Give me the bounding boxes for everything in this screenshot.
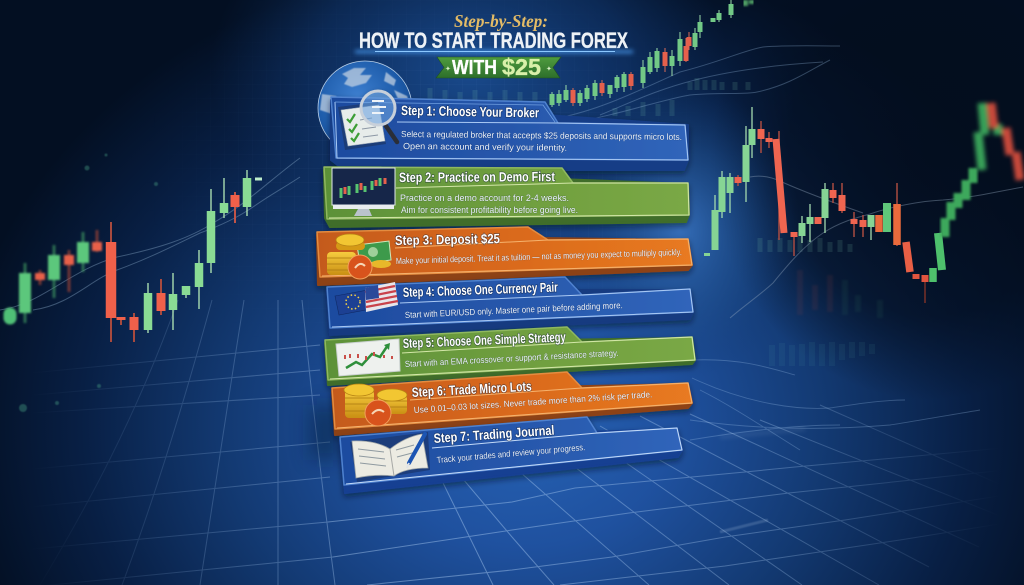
step 6 description: Use 0.01–0.03 lot sizes. Never trade more than 2% risk per trade. <box>413 389 653 415</box>
step 5 heading: Step 5: Choose One Simple Strategy <box>403 329 566 351</box>
wavy lines right of panels <box>690 360 980 450</box>
step 5 description: Start with an EMA crossover or support & resistance strategy. <box>405 348 619 369</box>
step 4 heading: Step 4: Choose One Currency Pair <box>403 280 559 300</box>
grid below and right of panels <box>328 395 1024 585</box>
panel: step 3 <box>317 227 692 285</box>
grid left of panels <box>0 300 335 585</box>
step 7 heading: Step 7: Trading Journal <box>433 423 555 446</box>
ribbon: with $25: $25 <box>502 54 541 80</box>
ribbon: with $25: ✦ <box>445 65 451 73</box>
title: step-by-step: Step-by-Step: <box>454 11 548 31</box>
ribbon: with $25: ✦ <box>546 65 552 73</box>
step 7 description: Track your trades and review your progress. <box>436 442 586 465</box>
panel: step 1 <box>331 91 688 170</box>
chart: left candlesticks <box>0 158 300 342</box>
ribbon: with $25: WITH <box>452 57 497 79</box>
icon: clipboard with magnifier <box>338 91 397 150</box>
ribbon: with $25 <box>436 54 561 80</box>
background dots <box>19 154 158 412</box>
panel: step 6 <box>332 372 692 435</box>
title glow line <box>355 50 633 53</box>
icon: globe <box>318 61 412 155</box>
step 2 description <box>400 193 578 215</box>
soft shadow left of panels <box>310 405 340 460</box>
panel: step 4 <box>327 277 693 335</box>
panel: step 5 <box>325 327 695 385</box>
icon: EU and US flags <box>335 282 398 315</box>
icon: open journal and pen <box>350 432 430 482</box>
step 2 heading: Step 2: Practice on Demo First <box>399 169 555 185</box>
step 1 description: Select a regulated broker that accepts $25 deposits and supports micro lots. <box>401 129 682 142</box>
chart: right candlesticks <box>707 103 1023 318</box>
step 1 description <box>401 129 682 153</box>
step 3 heading: Step 3: Deposit $25 <box>395 231 500 248</box>
step 1 heading: Step 1: Choose Your Broker <box>401 103 540 120</box>
icon: coin stacks <box>344 384 407 426</box>
title: how to start trading forex: HOW TO START TRADING FOREX <box>359 28 628 53</box>
panel: step 2 <box>324 167 689 227</box>
panel: step 7 <box>340 417 682 493</box>
step 2 description: Practice on a demo account for 2-4 weeks. <box>400 193 569 203</box>
icon: rising strategy chart <box>336 339 400 376</box>
chart: faint lower-right ghost candles <box>800 270 880 318</box>
step 3 description: Make your initial deposit. Treat it as tuition — not as money you expect to multiply quickly. <box>396 247 682 266</box>
step 6 heading: Step 6: Trade Micro Lots <box>411 379 532 400</box>
step 1 description: Open an account and verify your identity. <box>403 141 567 153</box>
chart: faint volume bars behind panels <box>430 78 850 252</box>
icon: coins and banknote <box>327 234 391 279</box>
chart: top centre rising candlesticks <box>552 0 840 125</box>
step 2 description: Aim for consistent profitability before going live. <box>401 205 578 215</box>
faint teal bars <box>772 342 872 366</box>
icon: monitor with chart <box>332 168 395 216</box>
step 4 description: Start with EUR/USD only. Master one pair before adding more. <box>405 300 623 320</box>
